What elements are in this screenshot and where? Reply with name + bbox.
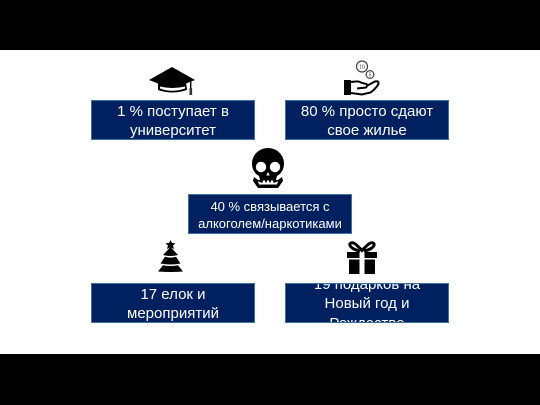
text: university [117,102,229,139]
panel: university [91,100,255,140]
text: gifts [314,283,420,323]
text: alcohol and drugs: 40 % связывается с [210,199,330,214]
panel: gifts [285,283,449,323]
icon: hand with coins: 5 [369,72,372,78]
panel: renting [285,100,449,140]
text: alcohol and drugs: алкоголем/наркотиками [198,216,342,231]
icon: skull [252,148,284,188]
panel: alcohol and drugs [188,194,352,234]
text: renting [301,102,433,139]
text: renting: 80 % просто сдают [301,102,433,120]
text: gifts: Новый год и [325,295,409,312]
text: christmas trees and events: мероприятий [127,305,219,322]
text: christmas trees and events [127,286,219,322]
icon: hand with coins [344,60,380,96]
text: alcohol and drugs [198,199,342,231]
text: renting: свое жилье [327,122,407,139]
top black band [0,0,540,50]
text: christmas trees and events: 17 елок и [140,286,206,302]
text: university: 1 % поступает в [117,102,229,120]
icon: gift box [347,241,377,274]
bottom black band [0,354,540,405]
icon: christmas tree [158,240,183,272]
panel: christmas trees and events [91,283,255,323]
text: university: университет [130,122,216,139]
icon: graduation cap [149,67,195,95]
icon: hand with coins: 10 [359,64,365,70]
